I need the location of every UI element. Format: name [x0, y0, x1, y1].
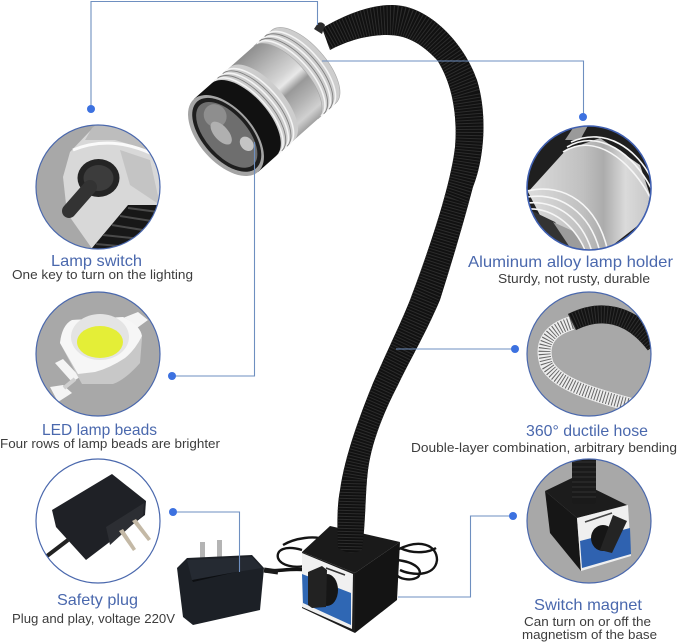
LED ring [36, 292, 160, 416]
base right face [355, 542, 400, 633]
knob handle [308, 566, 327, 608]
magnet title: Switch magnet [534, 597, 643, 614]
panel: switch magnet [526, 458, 652, 584]
adapter plate [192, 570, 236, 582]
front ring grooves [217, 59, 303, 151]
plug detail image [46, 474, 151, 560]
strain relief [264, 570, 278, 572]
plug title: Safety plug [57, 592, 138, 609]
holder ring [527, 126, 651, 250]
callout dots [87, 105, 587, 520]
base front edge [302, 552, 355, 633]
holder detail image [528, 126, 650, 250]
magnet description line 2: magnetism of the base [522, 628, 657, 642]
callout lines [91, 2, 584, 597]
blue label [302, 574, 351, 625]
LED highlight small [237, 134, 257, 154]
lens highlight [199, 99, 231, 132]
lamp switch detail image [36, 126, 160, 248]
holder description: Sturdy, not rusty, durable [498, 272, 650, 286]
aluminum body [194, 16, 352, 172]
magnetic base [302, 526, 400, 633]
lens glass [185, 91, 269, 178]
rear ring band [254, 16, 352, 119]
LED title: LED lamp beads [42, 422, 157, 439]
front rings [215, 57, 306, 153]
panel: lamp switch [35, 124, 161, 250]
rear ring grooves [259, 22, 345, 114]
lamp switch title: Lamp switch [51, 253, 142, 270]
power adapter [177, 540, 278, 625]
lamp switch nub on head [314, 22, 325, 34]
LED detail image [36, 292, 160, 416]
lamp switch ring [36, 125, 160, 249]
hose title: 360° ductile hose [526, 423, 648, 440]
magnet ring [527, 459, 651, 583]
adapter body [177, 555, 264, 625]
holder title: Aluminum alloy lamp holder [468, 254, 674, 271]
panel: LED beads [35, 291, 161, 417]
adapter top face [187, 557, 262, 580]
magnet detail image [528, 460, 650, 582]
power cord loops [265, 538, 437, 579]
plug description: Plug and play, voltage 220V [12, 612, 176, 626]
adapter prongs [200, 542, 205, 568]
lens recess [179, 86, 274, 184]
hose ring [527, 292, 651, 416]
lamp switch description: One key to turn on the lighting [12, 268, 193, 282]
black front band [194, 67, 294, 172]
flexible hose [323, 5, 484, 552]
magnet description line 1: Can turn on or off the [524, 615, 651, 629]
hose detail image [528, 292, 650, 416]
lamp head [174, 16, 352, 190]
panel: lamp holder [526, 125, 652, 251]
panel: ductile hose [526, 291, 652, 417]
panel: safety plug [35, 458, 161, 584]
white label plate [302, 553, 353, 629]
knob dial [316, 574, 338, 606]
front ring band [212, 53, 311, 156]
rear rings [257, 20, 348, 116]
plug ring [36, 459, 160, 583]
front bezel [174, 81, 278, 190]
hose description: Double-layer combination, arbitrary bending [411, 441, 677, 455]
base top face [302, 526, 400, 573]
label scale [326, 568, 345, 575]
LED description: Four rows of lamp beads are brighter [0, 437, 220, 451]
LED highlight large [207, 118, 236, 148]
